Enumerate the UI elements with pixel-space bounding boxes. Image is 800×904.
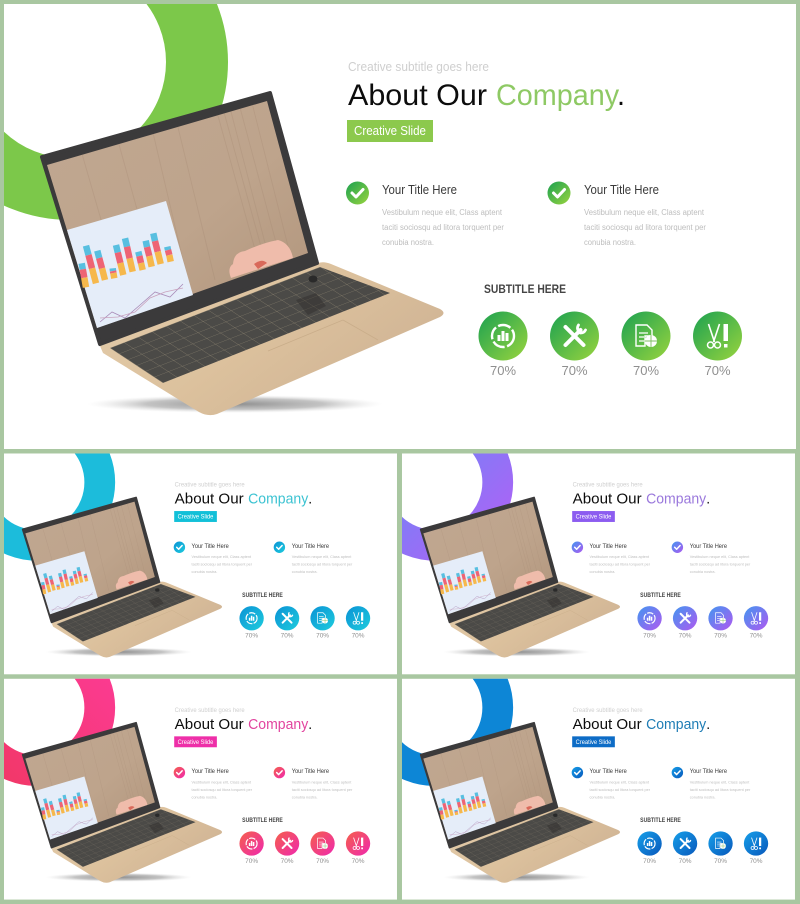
panel: pink slide [4,678,397,900]
item 2: Vestibulum neque elit, Class aptent [584,208,705,217]
stat 2 [673,831,697,865]
stat 2: 70% [281,633,294,640]
stat 3 [708,606,733,640]
stat 4: 70% [352,858,365,865]
stat 3 [622,312,670,378]
item 2 [672,767,751,799]
stat 4 [346,606,370,640]
item 1 [572,767,651,799]
item 2: Vestibulum neque elit, Class aptent [292,554,352,559]
item 2: conubia nostra. [690,794,716,799]
subtitle: Creative subtitle goes here [348,60,489,74]
badge [174,736,217,747]
item 1: conubia nostra. [590,794,615,799]
panel: cyan slide [4,454,397,674]
laptop mockup [23,498,222,657]
stat 4: 70% [704,363,731,378]
stat 4: 70% [750,858,763,865]
decorative ring [0,419,100,545]
item 2: conubia nostra. [584,238,636,247]
badge [174,511,217,522]
section subtitle: SUBTITLE HERE [242,818,283,824]
title: Company. [496,79,625,112]
badge: Creative Slide [178,739,214,746]
item 2: taciti sociosqu ad litora torquent per [584,223,706,232]
title: Company. [248,717,312,733]
item 2: conubia nostra. [292,794,318,799]
title [573,717,710,733]
item 1: taciti sociosqu ad litora torquent per [382,223,504,232]
item 2: Vestibulum neque elit, Class aptent [292,779,352,784]
stat 1: 70% [643,633,656,640]
stat 3: 70% [714,633,727,640]
item 1 [572,542,651,574]
item 2: Your Title Here [292,543,330,550]
item 2 [548,182,706,247]
item 2: taciti sociosqu ad litora torquent per [690,562,751,567]
item 2 [274,767,353,799]
stat 3: 70% [316,858,329,865]
badge: Creative Slide [354,124,426,138]
stat 4 [744,606,768,640]
panel: blue slide [402,678,795,900]
item 2: taciti sociosqu ad litora torquent per [292,562,353,567]
stat 1 [239,831,264,865]
title: Company. [646,492,710,508]
stat 4 [346,831,370,865]
stat 1 [637,606,662,640]
item 1: conubia nostra. [192,794,217,799]
item 2: Vestibulum neque elit, Class aptent [690,554,750,559]
stat 2 [275,831,299,865]
item 1: taciti sociosqu ad litora torquent per [590,787,651,792]
item 2: Your Title Here [292,768,330,775]
item 1: Vestibulum neque elit, Class aptent [590,779,650,784]
item 2 [672,542,751,574]
item 1 [174,542,253,574]
stat 2 [550,312,599,378]
item 2: Vestibulum neque elit, Class aptent [690,779,750,784]
badge [572,511,615,522]
badge [572,736,615,747]
stat 3: 70% [316,633,329,640]
item 2: taciti sociosqu ad litora torquent per [292,787,353,792]
stat 4 [693,312,742,378]
panel: purple slide [402,454,795,674]
subtitle: Creative subtitle goes here [573,482,643,489]
item 1 [346,182,504,247]
item 1: Vestibulum neque elit, Class aptent [382,208,503,217]
item 1: Your Title Here [192,543,229,550]
stat 2 [275,606,299,640]
item 1: taciti sociosqu ad litora torquent per [192,562,253,567]
title: About Our [573,717,642,733]
stat 3 [310,831,335,865]
stat 1: 70% [643,858,656,865]
stat 2: 70% [281,858,294,865]
stat 2 [673,606,697,640]
item 1: Vestibulum neque elit, Class aptent [590,554,650,559]
item 2: taciti sociosqu ad litora torquent per [690,787,751,792]
stat 1: 70% [490,363,516,378]
stat 1 [239,606,264,640]
item 1: Your Title Here [590,543,627,550]
stat 1 [637,831,662,865]
title: About Our [573,492,642,508]
title: Company. [646,717,710,733]
title: Company. [248,492,312,508]
item 1: conubia nostra. [192,569,217,574]
stat 2: 70% [679,858,692,865]
title: About Our [175,492,244,508]
item 1: taciti sociosqu ad litora torquent per [192,787,253,792]
decorative ring [0,0,197,189]
decorative ring [402,454,514,560]
laptop mockup [421,723,620,883]
title [348,79,625,112]
laptop mockup [23,723,222,883]
item 2: Your Title Here [690,768,728,775]
stat 1 [478,312,528,378]
item 1: Your Title Here [590,768,627,775]
stat 2: 70% [561,363,588,378]
item 2: Your Title Here [690,543,728,550]
title: About Our [348,79,487,112]
subtitle: Creative subtitle goes here [175,482,245,489]
title [573,492,710,508]
badge: Creative Slide [178,513,214,520]
badge: Creative Slide [576,739,612,746]
section subtitle: SUBTITLE HERE [242,593,283,599]
stat 4 [744,831,768,865]
subtitle: Creative subtitle goes here [573,707,643,714]
item 2: Your Title Here [584,183,659,197]
stat 3 [708,831,733,865]
stat 3: 70% [714,858,727,865]
item 1: conubia nostra. [382,238,434,247]
stat 4: 70% [750,633,763,640]
section subtitle: SUBTITLE HERE [640,593,681,599]
section subtitle: SUBTITLE HERE [640,818,681,824]
item 1: Your Title Here [382,183,457,197]
badge [347,120,433,142]
item 1: conubia nostra. [590,569,615,574]
stat 3 [310,606,335,640]
item 2 [274,542,353,574]
decorative ring [402,678,514,786]
title: About Our [175,717,244,733]
item 1: Your Title Here [192,768,229,775]
stat 2: 70% [679,633,692,640]
stat 3: 70% [633,363,659,378]
title [175,717,312,733]
item 1 [174,767,253,799]
item 1: Vestibulum neque elit, Class aptent [192,554,252,559]
decorative ring [0,645,100,771]
stat 1: 70% [245,858,258,865]
laptop mockup [421,498,620,657]
item 1: Vestibulum neque elit, Class aptent [192,779,252,784]
section subtitle: SUBTITLE HERE [484,282,566,296]
laptop mockup [42,93,444,415]
badge: Creative Slide [576,513,612,520]
item 2: conubia nostra. [690,569,716,574]
item 2: conubia nostra. [292,569,318,574]
stat 4: 70% [352,633,365,640]
subtitle: Creative subtitle goes here [175,707,245,714]
panel: main green slide [0,0,796,449]
item 1: taciti sociosqu ad litora torquent per [590,562,651,567]
stat 1: 70% [245,633,258,640]
title [175,492,312,508]
